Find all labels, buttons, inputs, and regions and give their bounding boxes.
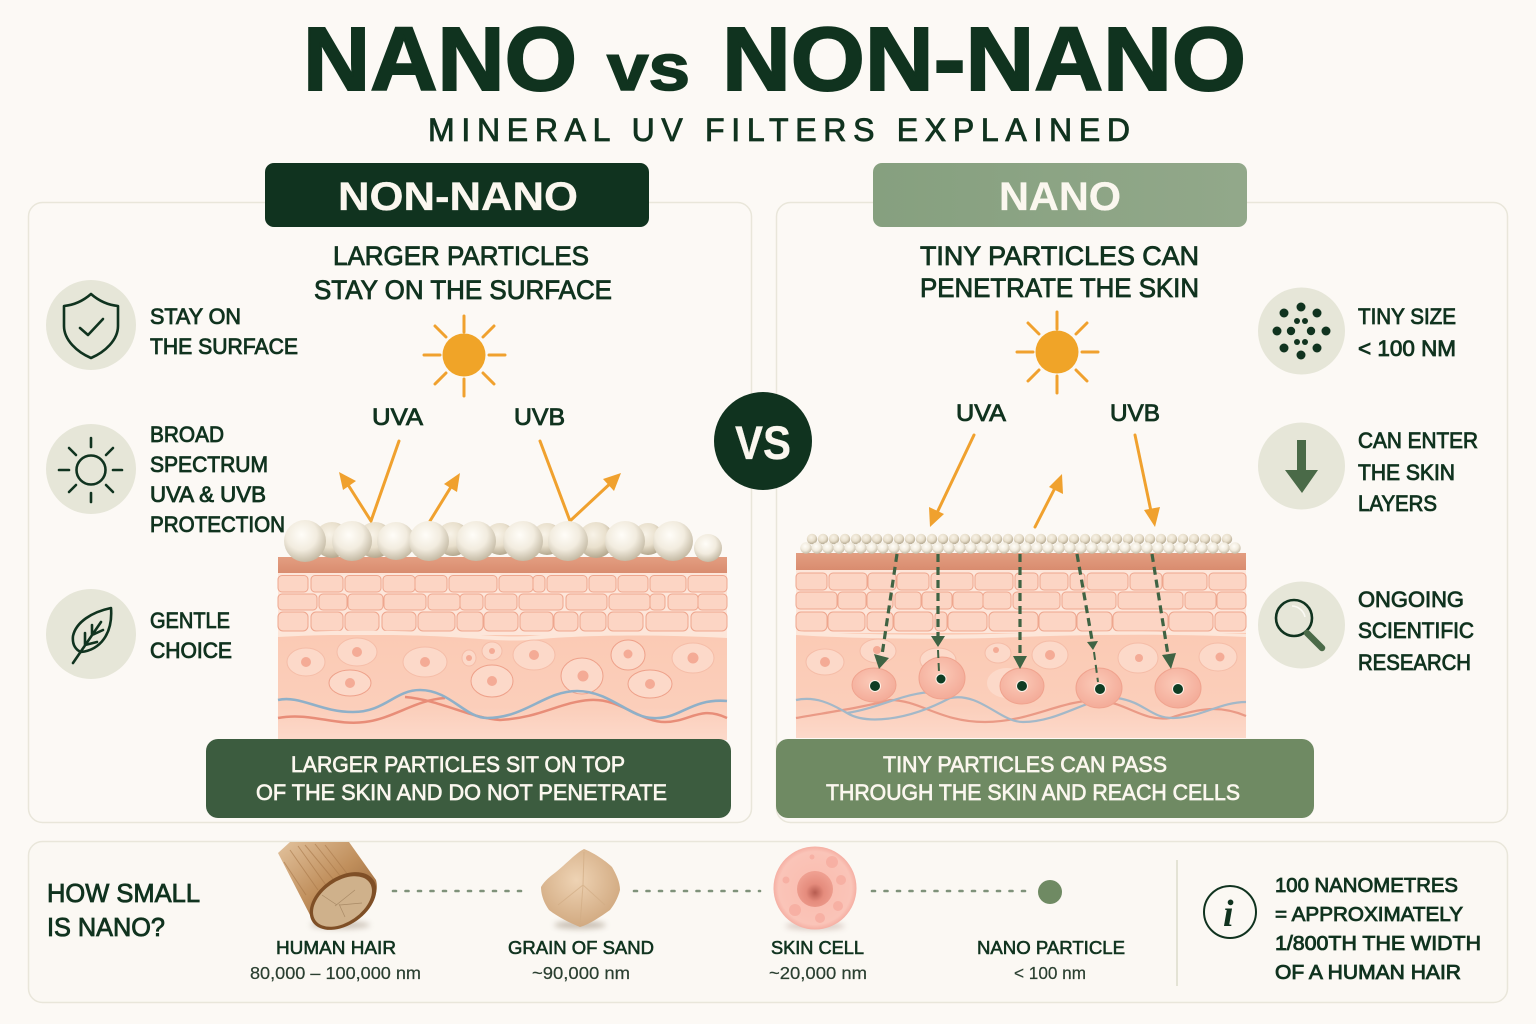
- note: 100 nanometres: = APPROXIMATELY: [1275, 903, 1463, 926]
- divider: [1176, 860, 1178, 986]
- dashed penetration arrows: [882, 554, 897, 655]
- stratum corneum band: [278, 557, 727, 573]
- label: gentle choice: CHOICE: [150, 638, 232, 663]
- icon: sun right: [1017, 312, 1098, 393]
- label: broad spectrum: BROAD: [150, 422, 224, 447]
- label: skin cell: [769, 937, 867, 983]
- dermis: [278, 630, 727, 740]
- label: can enter the skin layers: CAN ENTER: [1358, 428, 1478, 453]
- label: human hair: [250, 937, 421, 983]
- panel: how small is nano: [28, 842, 1508, 1002]
- label: ongoing scientific research: [1358, 587, 1474, 675]
- label: UVB right: UVB: [1110, 400, 1160, 427]
- icon: grain of sand: [541, 849, 620, 929]
- VS badge: [714, 392, 812, 490]
- nano particles in cells: [870, 674, 1184, 694]
- dermis cells: [287, 638, 714, 698]
- dotted line: sand to cell: [634, 890, 760, 892]
- nano subheading: PENETRATE THE SKIN: [920, 273, 1199, 303]
- icon: sun left: [424, 316, 505, 396]
- label: ongoing scientific research: RESEARCH: [1358, 650, 1471, 675]
- caption: non-nano: OF THE SKIN AND DO NOT PENETRATE: [256, 780, 667, 805]
- panel: non-nano: [28, 202, 752, 822]
- note: 100 nanometres: OF A HUMAN HAIR: [1275, 961, 1461, 984]
- header: nano: [873, 163, 1247, 227]
- icon: magnifier: [1258, 582, 1345, 668]
- title: NON-NANO: [722, 10, 1246, 110]
- blood vessels: [796, 700, 1246, 722]
- label: stay on the surface: THE SURFACE: [150, 334, 298, 359]
- arrows: UV on nano: [929, 435, 1160, 527]
- note: 100 nanometres: 1/800TH THE WIDTH: [1275, 932, 1481, 955]
- header: nano: NANO: [999, 175, 1121, 219]
- icon: leaf: [46, 589, 136, 679]
- nano subheading: TINY PARTICLES CAN: [920, 241, 1199, 271]
- heading: how small is nano: HOW SMALL: [47, 878, 200, 908]
- icon: nano particle: [1038, 880, 1062, 904]
- label: can enter the skin layers: THE SKIN: [1358, 460, 1455, 485]
- dermis cells: [806, 639, 1237, 698]
- label: human hair: HUMAN HAIR: [276, 937, 396, 958]
- icon: shield: [46, 280, 136, 370]
- caption: nano: TINY PARTICLES CAN PASS: [883, 752, 1167, 777]
- title: NANO: [303, 10, 577, 110]
- label: ongoing scientific research: ONGOING: [1358, 587, 1464, 612]
- arrows: UV reflected from surface: [339, 441, 621, 521]
- nano particle layer: [800, 534, 1241, 554]
- icon: down arrow: [1258, 422, 1345, 510]
- label: gentle choice: [150, 608, 232, 663]
- dotted line: cell to nano: [872, 890, 1025, 892]
- stratum corneum band: [796, 553, 1246, 570]
- icon: human hair: [278, 842, 387, 942]
- icon: info: i: [1223, 893, 1234, 935]
- skin cross-section: nano: [796, 534, 1246, 738]
- caption: non-nano: LARGER PARTICLES SIT ON TOP: [291, 752, 625, 777]
- label: skin cell: SKIN CELL: [771, 937, 864, 958]
- dermis: [796, 628, 1246, 738]
- non-nano subheading: [314, 241, 612, 305]
- heading: how small is nano: [47, 878, 200, 942]
- label: nano particle: < 100 nm: [1014, 963, 1086, 983]
- label: UVA right: UVA: [956, 400, 1006, 427]
- non-nano particles: [284, 520, 722, 562]
- blood vessels: [278, 697, 727, 723]
- icon: particles cluster: [1258, 288, 1345, 374]
- label: stay on the surface: STAY ON: [150, 304, 241, 329]
- label: UVA left: UVA: [372, 404, 423, 431]
- caption: nano: THROUGH THE SKIN AND REACH CELLS: [826, 780, 1240, 805]
- caption: nano: [776, 739, 1314, 818]
- label: nano particle: NANO PARTICLE: [977, 937, 1125, 958]
- note: 100 nanometres: [1275, 874, 1481, 984]
- VS badge: VS: [735, 416, 791, 469]
- caption: non-nano: [206, 739, 731, 818]
- heading: how small is nano: IS NANO?: [47, 912, 165, 942]
- label: grain of sand: GRAIN OF SAND: [508, 937, 654, 958]
- icon: skin cell: [774, 846, 856, 930]
- label: ongoing scientific research: SCIENTIFIC: [1358, 618, 1474, 643]
- dotted line: hair to sand: [393, 890, 528, 892]
- label: UVB left: UVB: [514, 404, 565, 431]
- label: broad spectrum: UVA & UVB: [150, 482, 266, 507]
- label: tiny size: TINY SIZE: [1358, 304, 1456, 329]
- icon: sun outline: [46, 424, 136, 514]
- header: non-nano: [265, 163, 649, 227]
- label: gentle choice: GENTLE: [150, 608, 230, 633]
- label: can enter the skin layers: LAYERS: [1358, 491, 1437, 516]
- note: 100 nanometres: 100 NANOMETRES: [1275, 874, 1458, 897]
- icon: info: [1204, 886, 1256, 938]
- label: broad spectrum: [150, 422, 285, 537]
- panel: nano: [776, 202, 1508, 822]
- skin cross-section: non-nano: [278, 520, 727, 740]
- title: vs: [607, 30, 690, 104]
- label: tiny size: < 100 NM: [1358, 336, 1456, 361]
- label: tiny size: [1358, 304, 1456, 361]
- label: stay on the surface: [150, 304, 298, 359]
- non-nano subheading: LARGER PARTICLES: [333, 241, 589, 271]
- header: non-nano: NON-NANO: [338, 175, 578, 219]
- label: skin cell: ~20,000 nm: [769, 963, 867, 983]
- label: nano particle: [977, 937, 1125, 983]
- title: [303, 10, 1246, 110]
- epidermis cells: [796, 570, 1246, 633]
- label: broad spectrum: SPECTRUM: [150, 452, 268, 477]
- label: human hair: 80,000 – 100,000 nm: [250, 963, 421, 983]
- target skin cells: [852, 657, 1201, 708]
- non-nano subheading: STAY ON THE SURFACE: [314, 275, 612, 305]
- epidermis cells: [278, 573, 727, 635]
- label: broad spectrum: PROTECTION: [150, 512, 285, 537]
- nano subheading: [920, 241, 1199, 303]
- label: grain of sand: ~90,000 nm: [532, 963, 630, 983]
- label: can enter the skin layers: [1358, 428, 1478, 516]
- subtitle: MINERAL UV FILTERS EXPLAINED: [428, 112, 1130, 148]
- label: grain of sand: [508, 937, 654, 983]
